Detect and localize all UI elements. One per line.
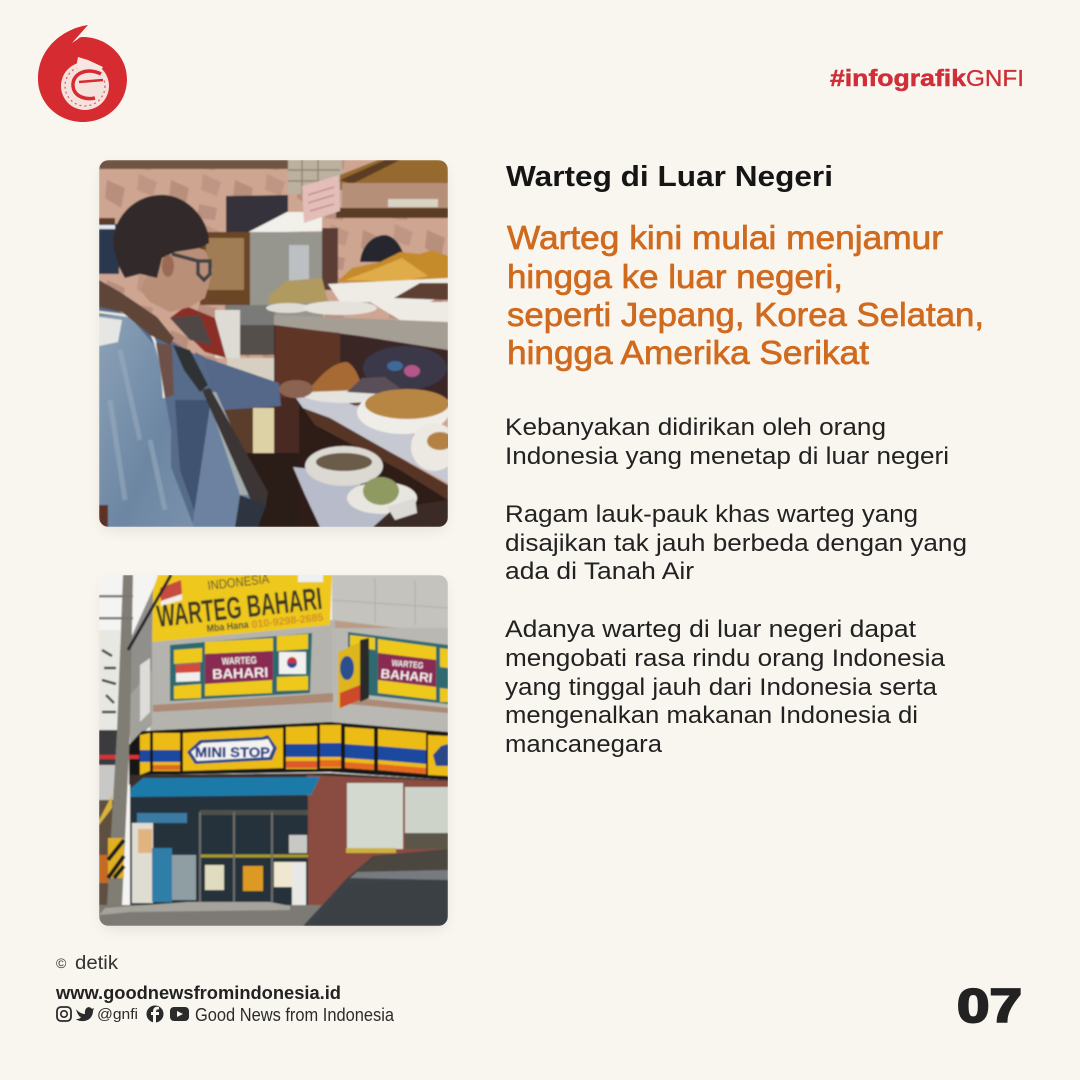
far arm	[195, 352, 281, 410]
highlighted statement: Warteg kini mulai menjamur	[507, 219, 943, 256]
sign: Warteg Bahari: Mba Hana	[206, 620, 249, 635]
section heading: Warteg di Luar Negeri	[506, 161, 833, 193]
right window text: Warteg Bahari: BAHARI	[380, 666, 433, 685]
right window text: Warteg Bahari	[380, 657, 434, 685]
icon: facebook	[146, 1006, 164, 1023]
photo: man choosing food at warteg counter	[99, 160, 457, 531]
hashtag	[830, 65, 1024, 91]
paragraph 2: Ragam lauk-pauk khas warteg yang	[505, 501, 918, 528]
window text: Warteg Bahari	[212, 655, 268, 682]
highlighted statement: seperti Jepang, Korea Selatan,	[507, 296, 984, 333]
woman behind the man	[170, 306, 226, 358]
paragraph 1: Kebanyakan didirikan oleh orang	[505, 414, 886, 441]
page number: 07	[957, 979, 1022, 1032]
account name: Good News from Indonesia	[195, 1005, 395, 1025]
paragraph 3: mengobati rasa rindu orang Indonesia	[505, 645, 946, 672]
sign: Warteg Bahari: 010-9298-2685	[251, 612, 324, 631]
paragraph 3: mengenalkan makanan Indonesia di	[505, 702, 918, 729]
head	[141, 248, 214, 312]
handle: @gnfi	[97, 1006, 138, 1023]
photo: Warteg Bahari storefront above Ministop	[99, 571, 448, 930]
hashtag: #infografik	[830, 65, 966, 91]
sign: Warteg Bahari: INDONESIA	[207, 571, 270, 593]
hashtag: GNFI	[966, 65, 1024, 91]
paragraph 3: yang tinggal jauh dari Indonesia serta	[505, 674, 938, 701]
icon: instagram	[57, 1007, 71, 1021]
window text: Warteg Bahari: WARTEG	[222, 655, 257, 668]
paragraph 1	[505, 414, 949, 470]
website url: www.goodnewsfromindonesia.id	[55, 983, 341, 1003]
paragraph 3: Adanya warteg di luar negeri dapat	[505, 616, 916, 643]
right window text: Warteg Bahari: WARTEG	[391, 658, 424, 671]
denim jacket body	[99, 306, 208, 524]
paragraph 2: ada di Tanah Air	[505, 558, 694, 585]
paragraph 2: disajikan tak jauh berbeda dengan yang	[505, 530, 967, 557]
Ministop sign text: MINI STOP	[195, 744, 270, 760]
window text: Warteg Bahari: BAHARI	[212, 664, 268, 682]
icon: youtube	[170, 1007, 189, 1021]
highlighted statement	[507, 219, 984, 371]
highlighted statement: hingga ke luar negeri,	[507, 258, 843, 295]
paragraph 1: Indonesia yang menetap di luar negeri	[505, 443, 949, 470]
icon: twitter	[76, 1007, 94, 1021]
highlighted statement: hingga Amerika Serikat	[507, 334, 869, 371]
photo credit: ©	[56, 955, 67, 971]
sign: Warteg Bahari: WARTEG BAHARI	[155, 581, 324, 634]
paragraph 3	[505, 616, 946, 758]
sign: Warteg Bahari	[154, 575, 324, 632]
paragraph 2	[505, 501, 967, 585]
social handles	[57, 1005, 395, 1025]
paragraph 3: mancanegara	[505, 731, 663, 758]
logo: GNFI red six with garuda emblem	[38, 25, 127, 122]
photo credit: detik	[75, 953, 119, 974]
